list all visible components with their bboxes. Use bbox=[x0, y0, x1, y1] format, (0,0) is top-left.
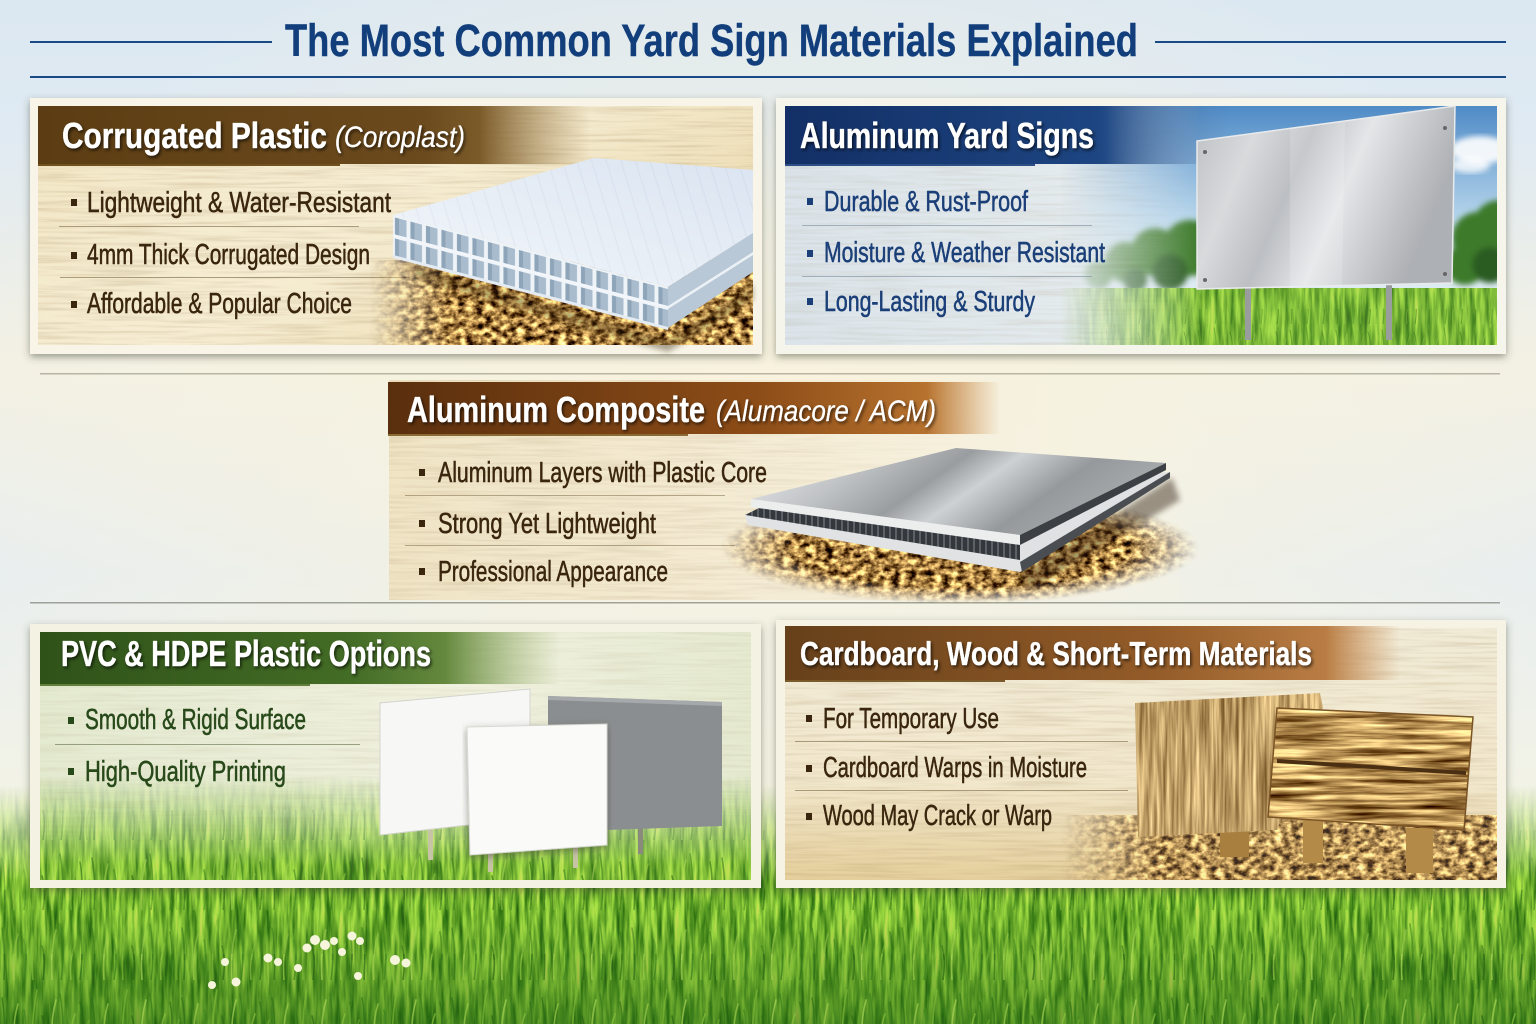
scene: grass strip bbox=[40, 778, 751, 880]
bullet list: aluminum: Long-Lasting & Sturdy bbox=[824, 286, 1035, 318]
bullet list: corrugated plastic bbox=[59, 187, 410, 320]
header band: corrugated plastic bbox=[38, 106, 590, 166]
header band: aluminum bbox=[785, 106, 1230, 166]
heading: cardboard and wood: Cardboard, Wood & Short-Term Materials bbox=[800, 635, 1312, 672]
panel: aluminum composite bbox=[388, 380, 1200, 605]
heading: aluminum yard signs: Aluminum Yard Signs bbox=[800, 115, 1094, 156]
icon: white wildflowers in grass bbox=[208, 932, 410, 989]
bullet list: PVC: High-Quality Printing bbox=[85, 756, 286, 788]
bullet list: aluminum composite bbox=[405, 457, 767, 588]
illustration: three plastic sign boards bbox=[380, 689, 722, 872]
bullet list: aluminum composite: Aluminum Layers with Plastic Core bbox=[438, 457, 767, 489]
illustration: aluminum sign on posts bbox=[1197, 106, 1455, 340]
bullet list: PVC bbox=[55, 704, 360, 788]
header band: aluminum composite bbox=[388, 382, 1000, 436]
heading: PVC and HDPE: PVC & HDPE Plastic Options bbox=[61, 633, 431, 674]
bullet list: aluminum composite: Strong Yet Lightweight bbox=[438, 508, 656, 540]
heading: aluminum composite: (Alumacore / ACM) bbox=[716, 395, 936, 428]
bullet list: corrugated plastic: Affordable & Popular Choice bbox=[87, 288, 352, 320]
bullet list: PVC: Smooth & Rigid Surface bbox=[85, 704, 306, 736]
header band: cardboard bbox=[785, 626, 1400, 682]
bullet list: aluminum composite: Professional Appearance bbox=[438, 556, 668, 588]
scene: sky, trees and grass bbox=[1060, 106, 1528, 345]
panel: aluminum yard signs bbox=[776, 98, 1528, 354]
illustration: aluminum composite panel on mulch bbox=[720, 448, 1200, 605]
illustration: corrugated plastic sheet on mulch bbox=[360, 158, 753, 352]
panel: corrugated plastic bbox=[30, 98, 762, 354]
title with side rules: The Most Common Yard Sign Materials Explained bbox=[285, 15, 1138, 66]
bullet list: aluminum bbox=[802, 186, 1105, 318]
panel: PVC and HDPE plastic bbox=[30, 624, 761, 888]
bullet list: cardboard: Wood May Crack or Warp bbox=[823, 800, 1052, 832]
header band: PVC bbox=[40, 632, 560, 686]
background: grass meadow bbox=[0, 780, 1536, 1024]
bullet list: corrugated plastic: Lightweight & Water-Resistant bbox=[87, 187, 391, 219]
bullet list: corrugated plastic: 4mm Thick Corrugated Design bbox=[87, 239, 370, 271]
heading: aluminum composite: Aluminum Composite bbox=[407, 389, 705, 430]
bullet list: cardboard: Cardboard Warps in Moisture bbox=[823, 752, 1087, 784]
bullet list: aluminum: Durable & Rust-Proof bbox=[824, 186, 1029, 218]
panel: cardboard and wood bbox=[776, 620, 1506, 888]
heading: corrugated plastic: Corrugated Plastic bbox=[62, 115, 327, 156]
heading: corrugated plastic: (Coroplast) bbox=[335, 121, 465, 154]
bullet list: aluminum: Moisture & Weather Resistant bbox=[824, 237, 1105, 269]
bullet list: cardboard: For Temporary Use bbox=[823, 703, 999, 735]
illustration: cardboard sheet and wooden sign on mulch bbox=[1040, 690, 1497, 880]
bullet list: cardboard bbox=[795, 703, 1128, 832]
